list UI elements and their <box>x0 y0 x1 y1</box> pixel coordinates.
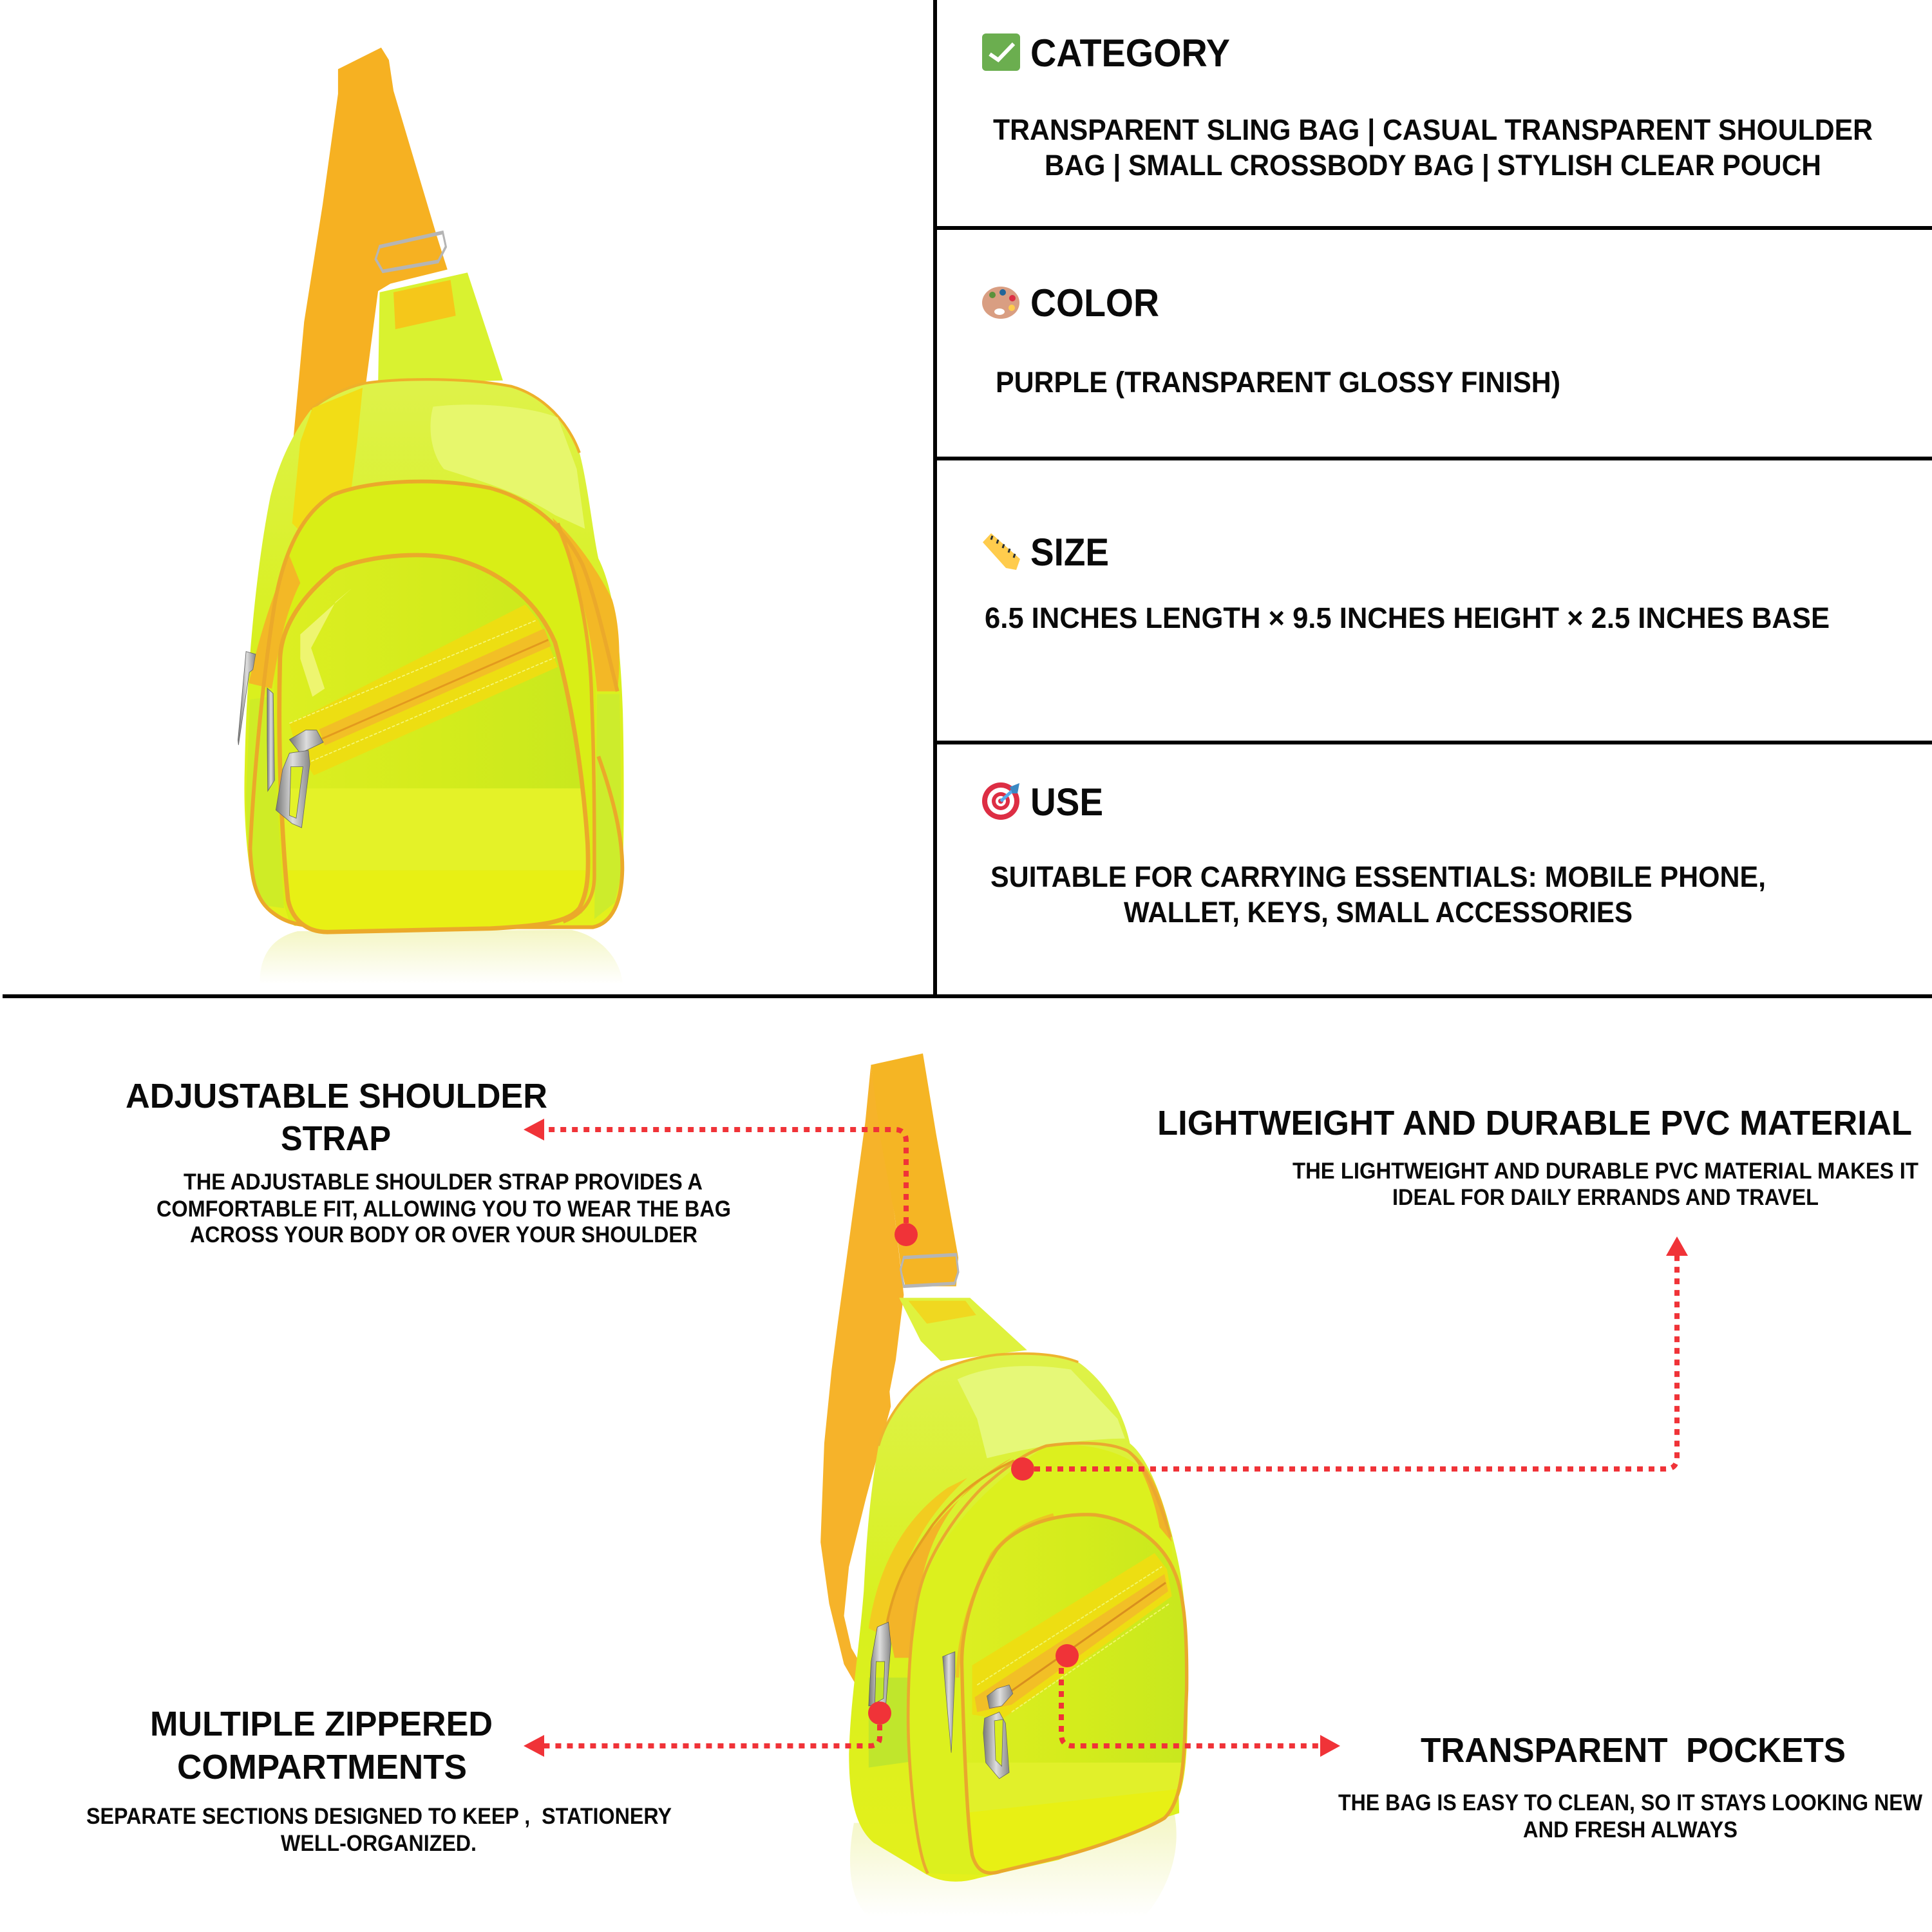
strap visible through body <box>869 1478 967 1641</box>
inner compartment <box>909 1444 1179 1875</box>
palette icon <box>982 287 1019 319</box>
bag body <box>244 379 624 929</box>
size description: 6.5 INCHES LENGTH × 9.5 INCHES HEIGHT × 2.5 INCHES BASE <box>985 601 1830 634</box>
top rim <box>311 379 580 453</box>
lower pocket glow <box>967 1763 1181 1812</box>
bag body <box>849 1354 1188 1882</box>
main zipper pull <box>983 1685 1013 1779</box>
text: multiple zippered compartments <box>86 1804 672 1856</box>
bottom tint <box>970 1789 1177 1871</box>
upper highlight <box>958 1366 1125 1458</box>
second zipper line <box>887 1461 1014 1622</box>
front pocket <box>279 555 588 932</box>
heading: transparent pockets: TRANSPARENT POCKETS <box>1421 1731 1846 1770</box>
bottom tint <box>287 870 586 930</box>
heading: adjustable shoulder strap <box>126 1077 547 1158</box>
zipper band <box>974 1574 1168 1712</box>
outer bottom seam <box>250 757 622 927</box>
diagonal zipper tape <box>972 1553 1172 1719</box>
right gusset <box>553 518 620 691</box>
arrow: shoulder strap callout <box>524 1119 918 1246</box>
right side panel <box>594 694 622 919</box>
use description: SUITABLE FOR CARRYING ESSENTIALS: MOBILE PHONE, <box>990 860 1766 893</box>
arrow: transparent pockets callout <box>1056 1644 1340 1757</box>
text: adjustable shoulder strap: THE ADJUSTABLE SHOULDER STRAP PROVIDES A <box>184 1170 703 1195</box>
use description: WALLET, KEYS, SMALL ACCESSORIES <box>1124 896 1633 929</box>
text: PVC material: IDEAL FOR DAILY ERRANDS AND TRAVEL <box>1392 1185 1819 1210</box>
body detail group <box>849 1354 1194 1917</box>
arrow: PVC material callout <box>1011 1236 1688 1481</box>
heading: use: USE <box>1030 781 1103 824</box>
category description: BAG | SMALL CROSSBODY BAG | STYLISH CLEAR POUCH <box>1045 149 1821 182</box>
heading: category: CATEGORY <box>1030 32 1230 75</box>
upper highlight <box>430 404 585 529</box>
heading: PVC material: LIGHTWEIGHT AND DURABLE PVC MATERIAL <box>1157 1104 1912 1142</box>
floor reflection <box>850 1813 1177 1917</box>
floor reflection <box>260 930 623 984</box>
top rim <box>878 1354 1078 1446</box>
zipper band <box>319 629 551 746</box>
text: transparent pockets: AND FRESH ALWAYS <box>1523 1817 1738 1842</box>
use description <box>990 860 1766 929</box>
zipper stitching <box>977 1567 1170 1712</box>
text: adjustable shoulder strap <box>156 1170 731 1247</box>
text: multiple zippered compartments: SEPARATE SECTIONS DESIGNED TO KEEP , STATIONERY <box>86 1804 672 1829</box>
heading: color: COLOR <box>1030 281 1159 325</box>
zipper center line <box>322 640 548 739</box>
color description: PURPLE (TRANSPARENT GLOSSY FINISH) <box>996 366 1560 399</box>
diagonal zipper tape <box>289 605 558 775</box>
heading: multiple zippered compartments: COMPARTMENTS <box>177 1748 467 1786</box>
strap, tab and buckle <box>294 48 503 439</box>
text: adjustable shoulder strap: ACROSS YOUR BODY OR OVER YOUR SHOULDER <box>190 1222 697 1247</box>
heading: multiple zippered compartments <box>150 1705 493 1786</box>
text: adjustable shoulder strap: COMFORTABLE FIT, ALLOWING YOU TO WEAR THE BAG <box>156 1197 731 1222</box>
zipper gusset <box>887 1458 1012 1658</box>
left zipper pull <box>869 1622 891 1706</box>
dividers <box>3 0 1932 998</box>
main zipper arc <box>250 482 618 849</box>
front pocket <box>961 1515 1187 1873</box>
category description: TRANSPARENT SLING BAG | CASUAL TRANSPARENT SHOULDER <box>993 113 1873 147</box>
main zipper arc <box>908 1443 1171 1873</box>
inner seam <box>558 524 594 922</box>
window reflection <box>300 589 352 697</box>
heading: adjustable shoulder strap: STRAP <box>281 1119 391 1158</box>
category description <box>993 113 1873 182</box>
target icon <box>982 782 1019 820</box>
text: transparent pockets <box>1338 1790 1922 1842</box>
right gusset <box>1130 1451 1172 1542</box>
product photo: top yellow sling bag <box>238 48 624 984</box>
second zipper pull <box>943 1652 955 1753</box>
main zipper pull <box>276 730 323 828</box>
pocket gusset line <box>958 1515 1054 1678</box>
left gusset <box>249 556 300 688</box>
pocket interior details <box>273 589 598 935</box>
product photo: angled yellow sling bag <box>820 1054 1194 1917</box>
front pocket seam <box>961 1515 1187 1873</box>
pocket interior details <box>967 1553 1181 1871</box>
side zipper pulls <box>238 652 274 791</box>
left side panel <box>246 697 284 908</box>
text: PVC material <box>1293 1159 1918 1210</box>
heading: multiple zippered compartments: MULTIPLE ZIPPERED <box>150 1705 493 1743</box>
main compartment interior <box>274 482 596 922</box>
front pocket seam <box>279 555 588 932</box>
lower pocket glow <box>285 788 586 871</box>
zipper stitching <box>289 620 555 761</box>
check icon <box>982 33 1020 71</box>
arrow: zippered compartments callout <box>524 1701 891 1757</box>
ruler icon <box>983 533 1020 570</box>
body detail group <box>238 379 624 984</box>
lower left side panel <box>869 1678 913 1768</box>
strap, tab and buckle <box>820 1054 1027 1685</box>
zipper center line <box>992 1583 1166 1705</box>
heading: adjustable shoulder strap: ADJUSTABLE SHOULDER <box>126 1077 547 1115</box>
text: multiple zippered compartments: WELL-ORGANIZED. <box>281 1831 477 1856</box>
heading: size: SIZE <box>1030 531 1109 574</box>
strap visible through body <box>292 388 363 545</box>
